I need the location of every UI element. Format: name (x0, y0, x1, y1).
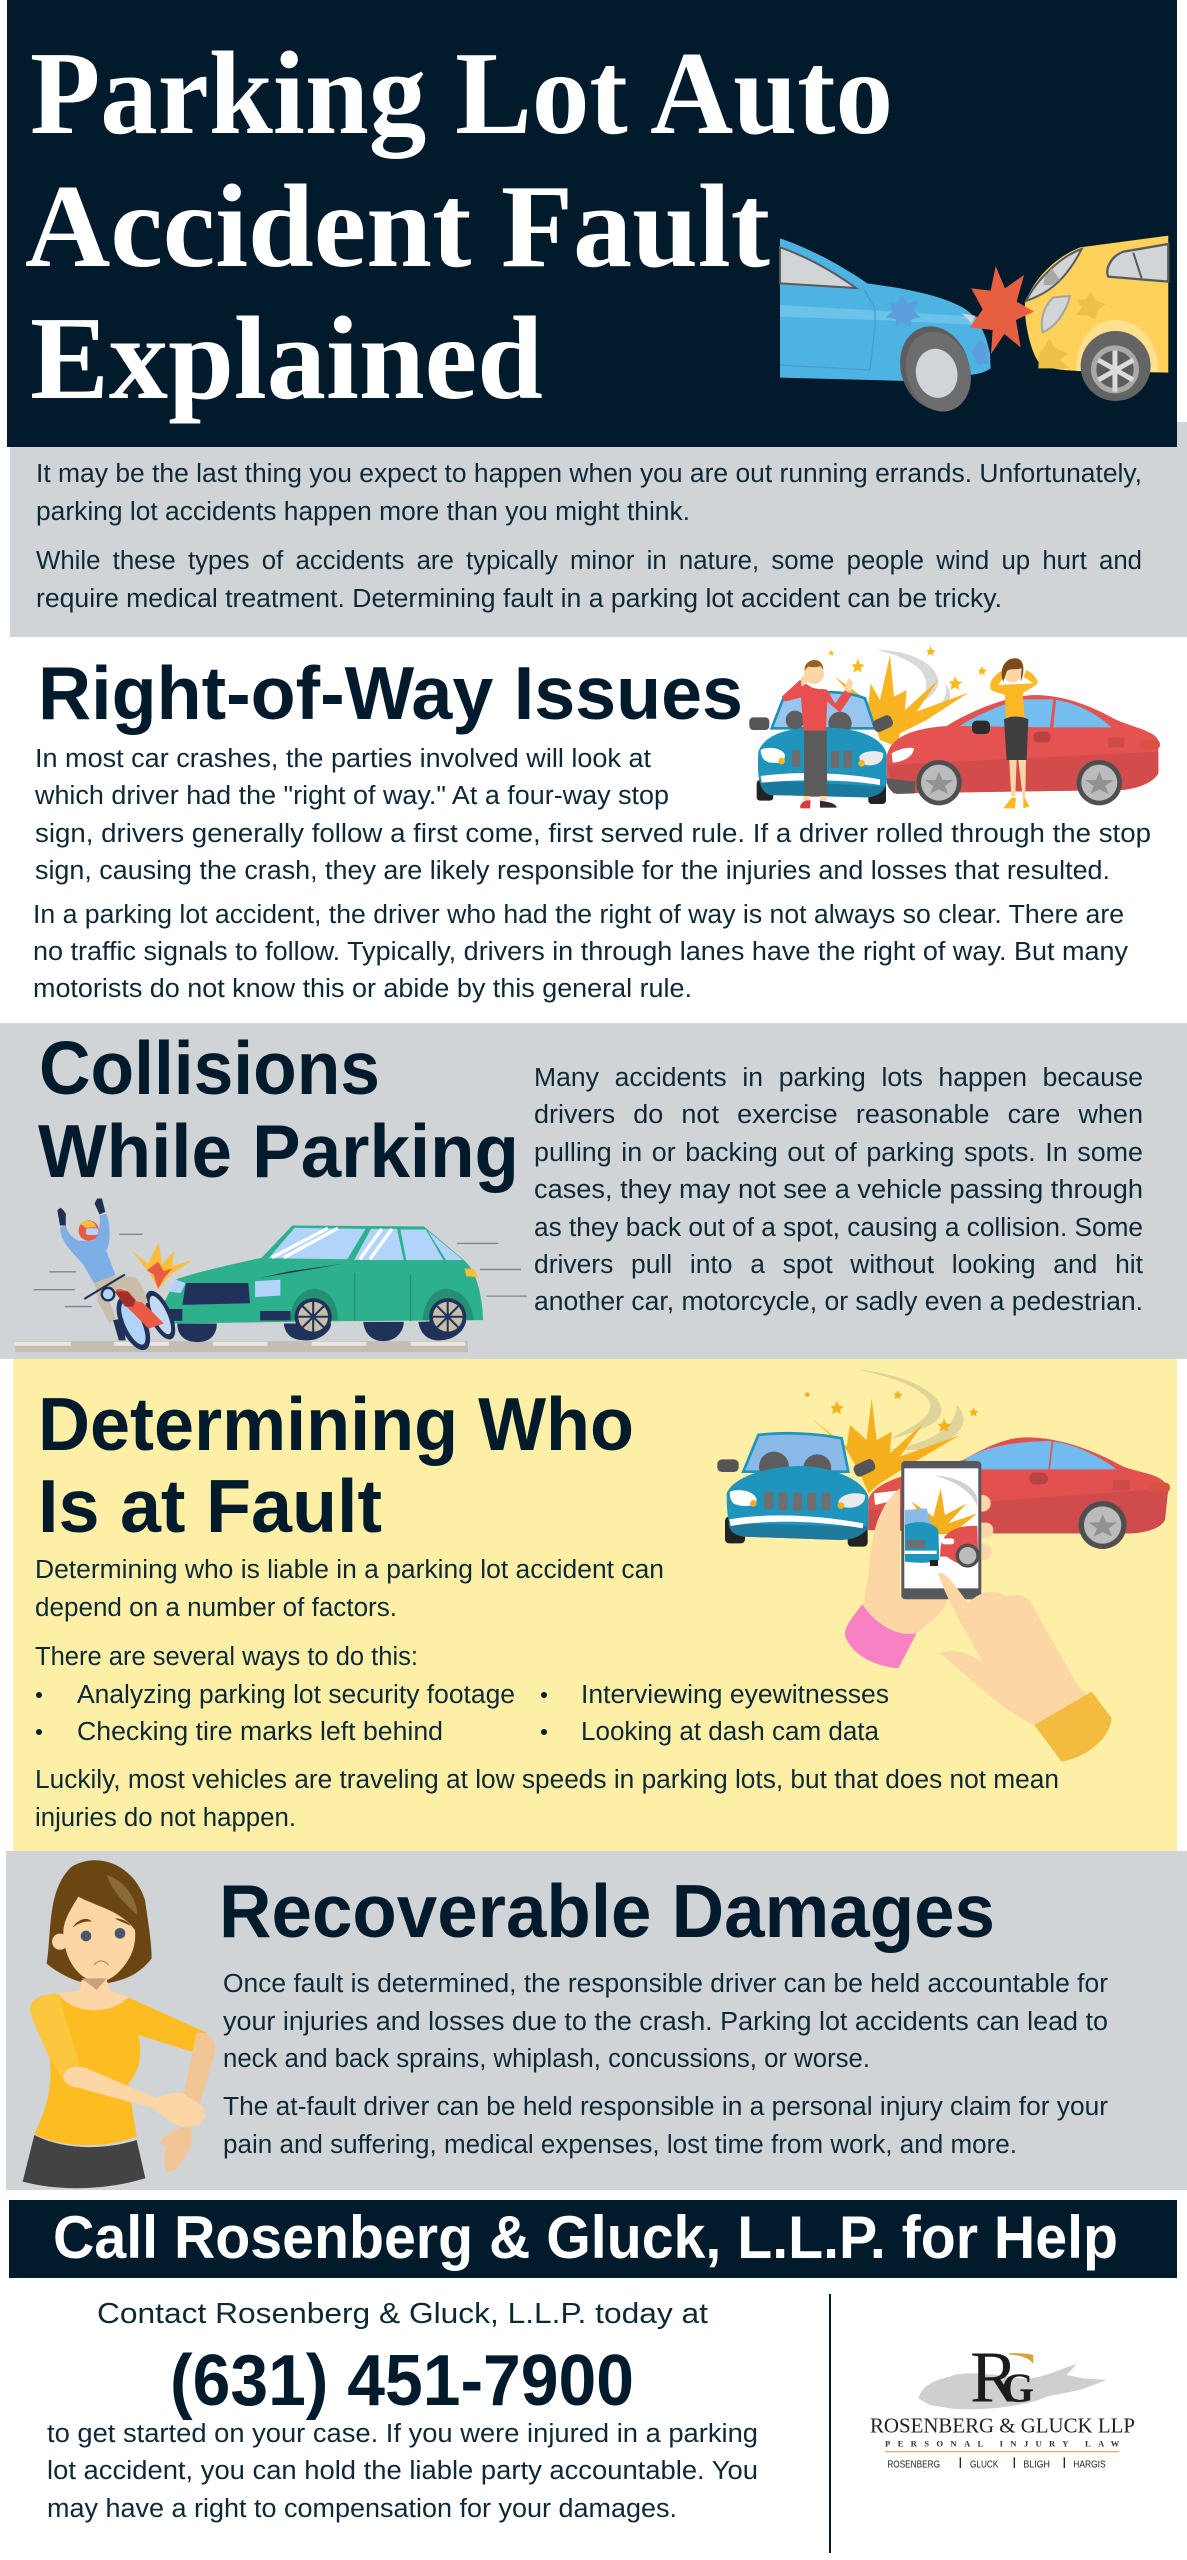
text: determining closing: Luckily, most vehicles are traveling at low speeds in parking lots, but that does not mean (35, 1766, 1059, 1794)
text: collisions body: drivers do not exercise reasonable care when (534, 1101, 1143, 1129)
text: determining closing: injuries do not happen. (35, 1804, 296, 1832)
panel: intro (10, 422, 1187, 637)
logo: Rosenberg & Gluck: G (1002, 2366, 1034, 2412)
icon: phone photographing crash (717, 1369, 1170, 1762)
contact line: Contact Rosenberg & Gluck, L.L.P. today at (97, 2298, 708, 2330)
contact body (47, 2420, 758, 2523)
bullet list: Analyzing parking lot security footage (77, 1681, 515, 1709)
logo: Rosenberg & Gluck (870, 2337, 1135, 2470)
heading: collisions (38, 1026, 519, 1193)
text: determining intro: Determining who is liable in a parking lot accident can (35, 1556, 664, 1584)
text: determining intro (35, 1556, 664, 1671)
logo: Rosenberg & Gluck: HARGIS (1073, 2459, 1106, 2470)
heading: recoverable damages: Recoverable Damages (219, 1869, 995, 1953)
text: collisions body: drivers pull into a spot without looking and hit (534, 1251, 1143, 1279)
icon: car hitting motorcycle (15, 1198, 527, 1355)
panel: collisions while parking (0, 1023, 1187, 1359)
text: determining intro: depend on a number of factors. (35, 1594, 397, 1622)
intro text: While these types of accidents are typically minor in nature, some people wind up hurt and (36, 547, 1142, 575)
intro text: It may be the last thing you expect to happen when you are out running errands. Unfortunately, (36, 460, 1142, 488)
text: right of way body: motorists do not know this or abide by this general rule. (33, 975, 692, 1003)
text: right of way body: In a parking lot accident, the driver who had the right of way is not always so clear. There are (33, 901, 1124, 929)
heading: right-of-way: Right-of-Way Issues (38, 651, 743, 735)
text: determining intro: There are several ways to do this: (35, 1643, 418, 1671)
text: right of way body: sign, drivers generally follow a first come, first served rule. If a driver rolled through the stop (35, 820, 1151, 848)
contact body: may have a right to compensation for your damages. (47, 2495, 677, 2523)
panel: right-of-way issues (33, 646, 1160, 1003)
text: right of way body: which driver had the "right of way." At a four-way stop (34, 782, 669, 810)
logo: Rosenberg & Gluck: BLIGH (1023, 2459, 1050, 2470)
logo: Rosenberg & Gluck: ROSENBERG & GLUCK LLP (870, 2416, 1135, 2438)
logo: Rosenberg & Gluck: ROSENBERG (887, 2459, 940, 2470)
phone number: (631) 451-7900 (170, 2341, 634, 2421)
bullet list: Looking at dash cam data (581, 1718, 880, 1746)
title (25, 27, 893, 424)
title: Explained (30, 292, 543, 424)
bullet list (36, 1681, 889, 1746)
text: determining closing (35, 1766, 1059, 1832)
text: collisions body: Many accidents in parking lots happen because (534, 1064, 1143, 1092)
text: damages body: your injuries and losses due to the crash. Parking lot accidents can lead to (223, 2008, 1108, 2036)
panel: recoverable damages (6, 1851, 1187, 2190)
text: collisions body: as they back out of a spot, causing a collision. Some (534, 1214, 1143, 1242)
logo: Rosenberg & Gluck: PERSONAL INJURY LAW (885, 2439, 1120, 2449)
bullet list: Interviewing eyewitnesses (581, 1681, 889, 1709)
text: damages body: Once fault is determined, the responsible driver can be held accountable for (223, 1970, 1109, 1998)
heading: determining: Is at Fault (38, 1464, 382, 1548)
text: right of way body: sign, causing the crash, they are likely responsible for the injuries and losses that resulted. (35, 857, 1110, 885)
text: right of way body: In most car crashes, the parties involved will look at (35, 745, 651, 773)
heading: determining (38, 1382, 634, 1548)
title: Parking Lot Auto (30, 27, 893, 159)
text: damages body (223, 1970, 1109, 2159)
bullet list: Checking tire marks left behind (77, 1718, 443, 1746)
text: collisions body (534, 1064, 1143, 1316)
text: right of way body: no traffic signals to follow. Typically, drivers in through lanes have the right of way. But many (33, 938, 1128, 966)
intro text: require medical treatment. Determining fault in a parking lot accident can be tricky. (36, 585, 1002, 613)
banner: call for help: Call Rosenberg & Gluck, L.L.P. for Help (53, 2204, 1118, 2271)
intro text: parking lot accidents happen more than you might think. (36, 498, 690, 526)
text: collisions body: cases, they may not see a vehicle passing through (534, 1176, 1143, 1204)
panel: determining who is at fault (13, 1359, 1177, 1853)
heading: collisions: Collisions (39, 1026, 380, 1110)
heading: determining: Determining Who (38, 1382, 634, 1466)
icon: injured woman holding arm (23, 1860, 215, 2188)
text: damages body: The at-fault driver can be held responsible in a personal injury claim for your (223, 2093, 1109, 2121)
text: right of way body (33, 745, 1151, 1003)
contact body: to get started on your case. If you were injured in a parking (47, 2420, 758, 2448)
text: collisions body: pulling in or backing out of parking spots. In some (534, 1139, 1143, 1167)
intro text (36, 460, 1142, 613)
logo: Rosenberg & Gluck: GLUCK (970, 2459, 999, 2470)
text: damages body: pain and suffering, medical expenses, lost time from work, and more. (223, 2131, 1017, 2159)
icon: crash with two drivers (749, 646, 1160, 808)
icon: two cars colliding (780, 236, 1168, 420)
panel: header (7, 0, 1177, 447)
logo: Rosenberg & Gluck: R (970, 2337, 1019, 2418)
heading: collisions: While Parking (38, 1109, 519, 1193)
text: collisions body: another car, motorcycle, or sadly even a pedestrian. (534, 1288, 1143, 1316)
contact body: lot accident, you can hold the liable party accountable. You (47, 2457, 758, 2485)
title: Accident Fault (25, 160, 770, 292)
text: damages body: neck and back sprains, whiplash, concussions, or worse. (223, 2045, 870, 2073)
